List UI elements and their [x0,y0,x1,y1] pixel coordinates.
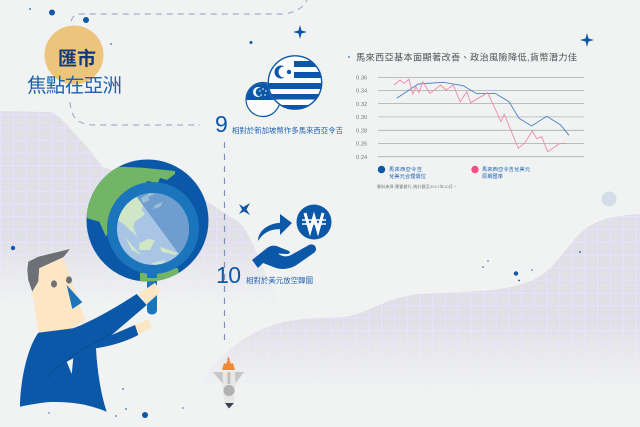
dashed vertical connector [224,142,226,345]
globe in magnifying glass [80,160,208,314]
line chart [356,76,584,161]
chart title: 馬來西亞基本面顯著改善、政治風險降低,貨幣潛力佳 [356,52,577,62]
pale decorative circle [602,192,616,206]
gridlines and tick labels: 0.26 [356,142,367,148]
icon: rocket [213,356,244,408]
series: forward rate line [394,79,566,152]
gridlines and tick labels [356,76,584,161]
chart legend: forward rate [471,165,531,180]
icon: Singapore and Malaysia flags [246,55,322,118]
label 9 [215,111,343,137]
gridlines and tick labels: 0.24 [356,155,368,161]
icon: hand with arrow and won coin [252,204,332,269]
heading badge: 匯市: 匯市 [58,47,96,70]
gridlines and tick labels: 0.32 [356,102,367,108]
gridlines and tick labels: 0.30 [356,115,367,121]
heading: 焦點在亞洲: 焦點在亞洲 [27,75,122,97]
series: reserves line [397,82,569,135]
gridlines and tick labels: 0.28 [356,128,367,134]
label 10: 10 [216,262,241,288]
gridlines and tick labels: 0.34 [356,89,368,95]
gridlines and tick labels: 0.36 [356,76,367,82]
chart legend: forward rate: 馬來西亞令吉兌美元 [482,165,531,173]
heading badge: 匯市 [44,26,104,84]
label 10: 相對於美元放空韓圜 [246,276,313,285]
dashed connector path [70,0,307,125]
illustration: businessman [20,249,161,412]
background shape: left halftone hill [0,111,270,290]
label 10 [216,262,313,288]
background shape: right halftone hill [210,214,640,375]
chart legend: reserves: 馬來西亞令吉 [389,165,422,173]
chart legend: forward rate: 原期匯率 [482,172,504,180]
chart legend: reserves: 兌美元合理價位 [389,172,427,180]
label 9: 9 [215,111,228,137]
chart legend: reserves [378,165,427,180]
label 9: 相對於新加坡幣作多馬來西亞令吉 [232,126,343,135]
source note: 資料來源:匯豐銀行,統計截至2017年10月。 [377,184,457,189]
